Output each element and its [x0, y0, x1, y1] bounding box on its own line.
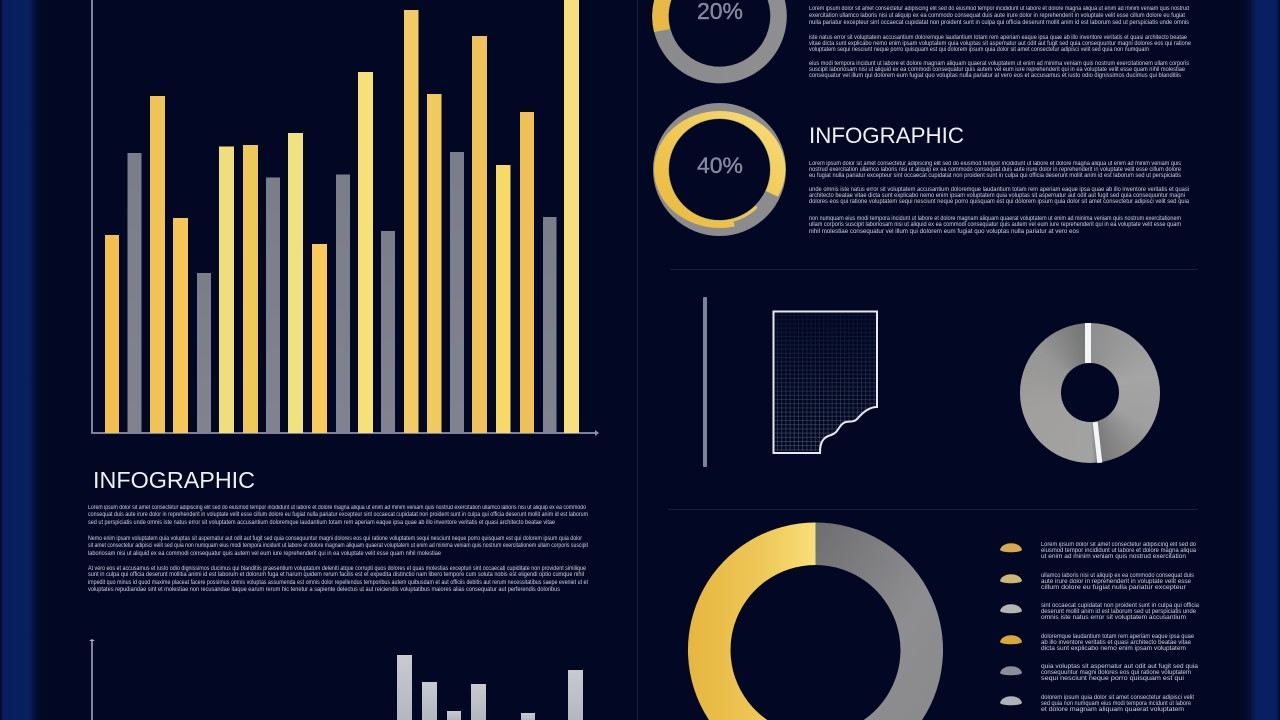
text block: legend descriptions: dicta sunt explicabo nemo enim ipsam voluptatem	[1041, 646, 1186, 652]
text block: top right paragraphs: nulla pariatur excepteur sint occaecat cupidatat non proident sunt in culpa qui officia deserunt mollit anim id est laborum sed ut perspiciatis unde omnis	[809, 20, 1189, 26]
ring segment: grey wedge	[735, 195, 774, 228]
text block: middle right paragraphs	[809, 161, 1190, 235]
donut segment: gold	[688, 522, 816, 720]
text block: middle right paragraphs: nostrud exercitation ullamco laboris nisi ut aliquip ex ea commodo consequat duis aute irure dolor in reprehenderit in voluptate velit esse cillum dolore	[809, 167, 1182, 173]
text block: top right paragraphs: consequatur vel illum qui dolorem eum fugiat quo voluptas nulla pariatur at vero eos et accusamus et iusto odio dignissimos ducimus qui blanditiis	[809, 73, 1181, 79]
progress ring: 40%	[654, 111, 785, 228]
bar chart: bottom	[89, 639, 583, 720]
legend marker: gold	[1000, 543, 1022, 552]
text block: legend descriptions: cillum dolore eu fugiat nulla pariatur excepteur	[1041, 585, 1186, 591]
text block: legend descriptions: sint occaecat cupidatat non proident sunt in culpa qui officia	[1041, 603, 1200, 609]
text block: legend descriptions: eiusmod tempor incididunt ut labore et dolore magna aliqua	[1041, 548, 1197, 554]
text block: middle right paragraphs: dolores eos qui ratione voluptatem sequi nesciunt neque porro quisquam est qui dolorem ipsum quia dolor sit amet consectetur adipisci velit sed quia	[809, 199, 1190, 205]
text block: left paragraphs: sunt in culpa qui officia deserunt mollitia animi id est laborum et dolorum fuga et harum quidem rerum facilis est et expedita distinctio nam libero tempore cum soluta nobis est eligendi optio cumque nihil	[88, 572, 584, 578]
document outline	[774, 312, 877, 453]
text block: legend descriptions: sequi nesciunt neque porro quisquam est qui	[1041, 676, 1184, 682]
text block: legend descriptions: dolorem ipsum quia dolor sit amet consectetur adipisci velit	[1041, 695, 1194, 701]
text block: left paragraphs: consequat duis aute irure dolor in reprehenderit in voluptate velit esse cillum dolore eu fugiat nulla pariatur excepteur sint occaecat cupidatat non proident sunt in culpa qui officia deserunt mollit anim id est laborum	[88, 512, 588, 518]
text block: middle right paragraphs: unde omnis iste natus error sit voluptatem accusantium doloremque laudantium totam rem aperiam eaque ipsa quae ab illo inventore veritatis et quasi	[809, 187, 1189, 193]
ring label: 40%	[697, 153, 743, 178]
ring progress	[654, 111, 785, 228]
text block: left paragraphs: At vero eos et accusamus et iusto odio dignissimos ducimus qui blanditiis praesentium voluptatum deleniti atque corrupti quos dolores et quas molestias excepturi sint occaecati cupiditate non provident similique	[88, 566, 587, 572]
text block: top right paragraphs	[809, 6, 1192, 79]
axis cap	[89, 639, 95, 641]
text block: top right paragraphs: Lorem ipsum dolor sit amet consectetur adipiscing elit sed do eiusmod tempor incididunt ut labore et dolore magna aliqua ut enim ad minim veniam quis nostrud	[809, 6, 1189, 12]
axis arrow	[595, 430, 599, 436]
text block: top right paragraphs: iste natus error sit voluptatem accusantium doloremque laudantium totam rem aperiam eaque ipsa quae ab illo inventore veritatis et quasi architecto beatae	[809, 35, 1188, 41]
text block: legend descriptions: ullamco laboris nisi ut aliquip ex ea commodo consequat duis	[1041, 573, 1194, 579]
text block: middle right paragraphs: architecto beatae vitae dicta sunt explicabo nemo enim ipsam voluptatem quia voluptas sit aspernatur aut odit aut fugit sed quia consequuntur magni	[809, 193, 1185, 199]
legend marker: amber	[1000, 635, 1022, 644]
bar chart: main	[92, 0, 599, 436]
text block: left paragraphs: sed ut perspiciatis unde omnis iste natus error sit voluptatem accusantium doloremque laudantium totam rem aperiam eaque ipsa quae ab illo inventore veritatis et quasi architecto beatae vitae	[88, 520, 556, 526]
bottom chart axis	[91, 640, 93, 720]
text block: legend descriptions: quia voluptas sit aspernatur aut odit aut fugit sed quia	[1041, 664, 1199, 670]
text block: legend descriptions: sed quia non numquam eius modi tempora incidunt ut labore	[1041, 701, 1192, 707]
text block: left paragraphs: Lorem ipsum dolor sit amet consectetur adipiscing elit sed do eiusmod tempor incididunt ut labore et dolore magna aliqua ut enim ad minim veniam quis nostrud exercitation ullamco laboris nisi ut aliquip ex ea commodo	[88, 505, 587, 511]
ring segment: grey wedge inner	[758, 193, 769, 208]
donut chart: small grey	[1020, 323, 1160, 464]
text block: legend descriptions: deserunt mollit anim id est laborum sed ut perspiciatis unde	[1041, 609, 1197, 615]
ring progress	[652, 0, 671, 32]
chart axes	[92, 0, 597, 433]
text block: legend descriptions: aute irure dolor in reprehenderit in voluptate velit esse	[1041, 579, 1192, 585]
ring track	[661, 111, 778, 228]
text block: left paragraphs: laboriosam nisi ut aliquid ex ea commodi consequatur quis autem vel eum iure reprehenderit qui in ea voluptate velit esse quam nihil molestiae	[88, 551, 442, 557]
text block: legend descriptions: doloremque laudantium totam rem aperiam eaque ipsa quae	[1041, 634, 1195, 640]
text block: legend descriptions: ut enim ad minim veniam quis nostrud exercitation	[1041, 554, 1186, 560]
text block: middle right paragraphs: Lorem ipsum dolor sit amet consectetur adipiscing elit sed do eiusmod tempor incididunt ut labore et dolore magna aliqua ut enim ad minim veniam quis	[809, 161, 1181, 167]
vertical gauge bar	[703, 297, 707, 467]
text block: left paragraphs: voluptates repudiandae sint et molestiae non recusandae itaque earum rerum hic tenetur a sapiente delectus ut aut reiciendis voluptatibus maiores alias consequatur aut perferendis doloribus	[88, 587, 560, 593]
text block: middle right paragraphs: ullam corporis suscipit laboriosam nisi ut aliquid ex ea commodi consequatur quis autem vel eum iure reprehenderit qui in ea voluptate velit esse quam	[809, 222, 1181, 228]
heading: left infographic: INFOGRAPHIC	[93, 467, 255, 493]
text block: top right paragraphs: suscipit laboriosam nisi ut aliquid ex ea commodi consequatur quis autem vel eum iure reprehenderit qui in ea voluptate velit esse quam nihil molestiae	[809, 67, 1186, 73]
donut chart: large	[688, 522, 943, 720]
heading: right infographic: INFOGRAPHIC	[809, 123, 964, 148]
text block: legend descriptions: et dolore magnam aliquam quaerat voluptatem	[1041, 707, 1184, 713]
text block: legend descriptions	[1041, 542, 1200, 713]
text block: legend descriptions: omnis iste natus error sit voluptatem accusantium	[1041, 615, 1186, 621]
text block: left paragraphs: sit amet consectetur adipisci velit sed quia non numquam eius modi tempora incidunt ut labore et dolore magnam aliquam quaerat voluptatem ut enim ad minima veniam quis nostrum exercitationem ullam corporis suscipit	[88, 543, 588, 549]
legend marker: light silver	[1000, 696, 1022, 705]
text block: legend descriptions: Lorem ipsum dolor sit amet consectetur adipiscing elit sed do	[1041, 542, 1197, 548]
legend	[1000, 543, 1022, 705]
text block: left paragraphs: impedit quo minus id quod maxime placeat facere possimus omnis voluptas assumenda est omnis dolor repellendus temporibus autem quibusdam et aut officiis debitis aut rerum necessitatibus saepe eveniet ut et	[88, 580, 588, 586]
text block: top right paragraphs: exercitation ullamco laboris nisi ut aliquip ex ea commodo consequat duis aute irure dolor in reprehenderit in voluptate velit esse cillum dolore eu fugiat	[809, 13, 1185, 19]
text block: legend descriptions: consequuntur magni dolores eos qui ratione voluptatem	[1041, 670, 1191, 676]
text block: legend descriptions: ab illo inventore veritatis et quasi architecto beatae vitae	[1041, 640, 1192, 646]
ring track	[652, 0, 787, 83]
document grid	[775, 313, 876, 451]
text block: top right paragraphs: vitae dicta sunt explicabo nemo enim ipsam voluptatem quia voluptas sit aspernatur aut odit aut fugit sed quia consequuntur magni dolores eos qui ratione	[809, 41, 1192, 47]
legend marker: grey	[1000, 666, 1022, 675]
text block: middle right paragraphs: eu fugiat nulla pariatur excepteur sint occaecat cupidatat non proident sunt in culpa qui officia deserunt mollit anim id est laborum sed ut perspiciatis	[809, 173, 1181, 179]
text block: middle right paragraphs: non numquam eius modi tempora incidunt ut labore et dolore magnam aliquam quaerat voluptatem ut enim ad minima veniam quis nostrum exercitationem	[809, 216, 1181, 222]
text block: top right paragraphs: eius modi tempora incidunt ut labore et dolore magnam aliquam quaerat voluptatem ut enim ad minima veniam quis nostrum exercitationem ullam corporis	[809, 61, 1189, 67]
legend marker: pale gold	[1000, 574, 1022, 583]
text block: top right paragraphs: voluptatem sequi nesciunt neque porro quisquam est qui dolorem ipsum quia dolor sit amet consectetur adipisci velit sed quia non numquam	[809, 47, 1149, 53]
text block: left paragraphs: Nemo enim ipsam voluptatem quia voluptas sit aspernatur aut odit aut fugit sed quia consequuntur magni dolores eos qui ratione voluptatem sequi nesciunt neque porro quisquam est qui dolorem ipsum quia dolor	[88, 536, 582, 542]
icon: torn document	[774, 312, 877, 453]
text block: middle right paragraphs: nihil molestiae consequatur vel illum qui dolorem eum fugiat quo voluptas nulla pariatur at vero eos	[809, 229, 1079, 235]
text block: left paragraphs	[88, 505, 588, 593]
progress ring: 20%	[652, 0, 787, 83]
legend marker: silver	[1000, 604, 1022, 613]
donut segment: grey	[816, 522, 943, 720]
